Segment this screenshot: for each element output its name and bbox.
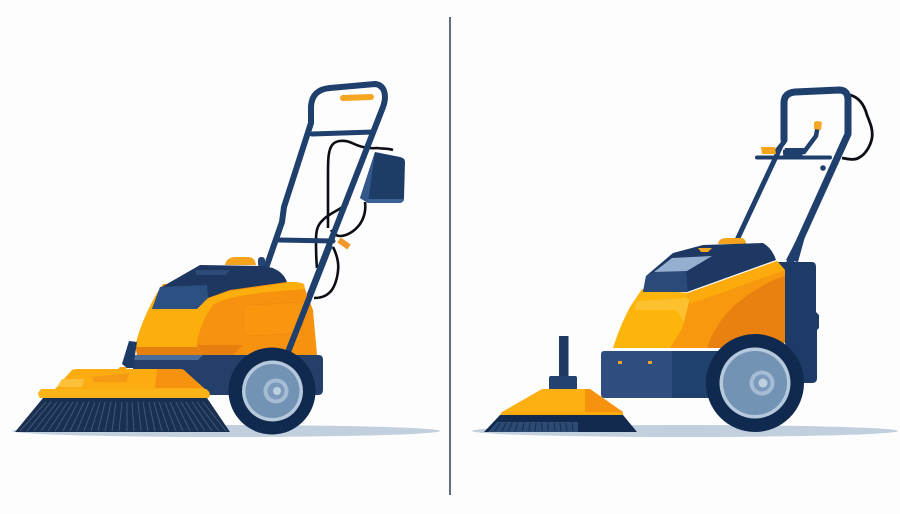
yellow body: left [135, 282, 317, 355]
control grip: right [761, 147, 776, 154]
wheel: right [706, 334, 804, 432]
machine base: right [601, 351, 725, 398]
ground shadow: left [12, 425, 440, 437]
brush housing: left [38, 369, 210, 398]
side rail over body: left [288, 245, 330, 352]
left sweeper [12, 84, 440, 437]
lever: left [339, 240, 349, 247]
dark top cover: right [643, 243, 776, 292]
brush bristles: left [15, 398, 230, 432]
brush post [559, 336, 568, 378]
ground shadow: right [472, 425, 898, 437]
brush collar [549, 376, 577, 389]
machine base: left [133, 355, 323, 395]
handle knob: right [820, 165, 826, 171]
base highlight: left [133, 355, 203, 360]
top cap: left [225, 257, 256, 265]
handle frame: right [737, 90, 848, 262]
cable: right [842, 95, 872, 159]
handle grip: left [343, 97, 371, 98]
control lever: right [783, 121, 822, 156]
brush arm: left [115, 341, 137, 372]
top cap: right [718, 238, 746, 244]
knob: left [258, 257, 265, 267]
back panel: right [778, 233, 819, 383]
wheel: left [228, 348, 316, 434]
brush bristles [484, 415, 637, 432]
right sweeper [472, 90, 898, 437]
yellow body: right [613, 261, 785, 348]
battery box: left [360, 152, 405, 203]
brush housing [502, 389, 623, 412]
handle frame: left [266, 84, 385, 312]
cables: left [314, 141, 393, 298]
centre divider line [449, 17, 451, 495]
dark top cover: left [152, 265, 287, 309]
detached brush: right [484, 336, 637, 432]
